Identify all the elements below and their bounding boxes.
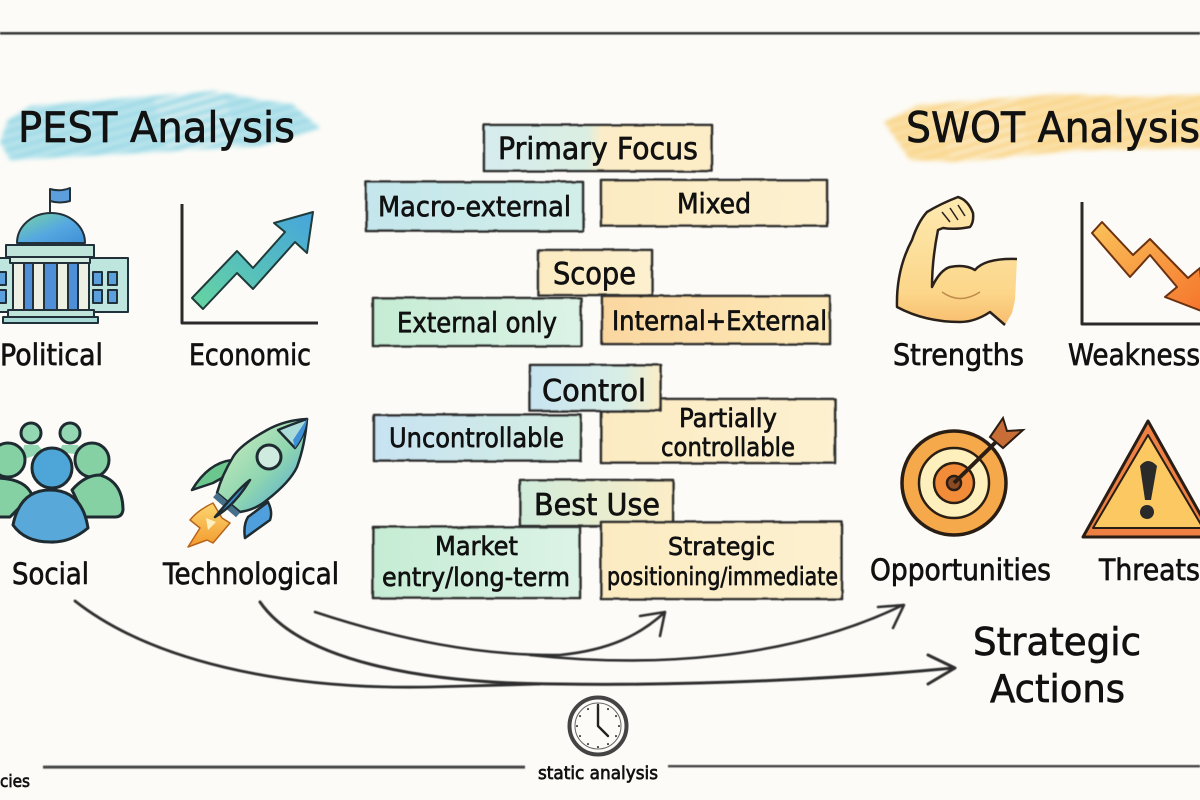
heading box: Primary Focus: Primary Focus bbox=[498, 132, 698, 167]
bottom rule right bbox=[668, 765, 1200, 767]
heading: PEST Analysis bbox=[0, 91, 320, 160]
icon: clock bbox=[570, 698, 626, 754]
icon: falling chart bbox=[1082, 202, 1200, 324]
cell: Internal+External: Internal+External bbox=[612, 306, 827, 337]
cell: Partially controllable: Partially bbox=[679, 404, 777, 434]
icon: warning triangle bbox=[1083, 421, 1200, 537]
icon: group of people bbox=[0, 423, 123, 542]
cell: Market entry/long-term: entry/long-term bbox=[382, 563, 570, 593]
arrow: Technological to Strategic Actions bbox=[260, 602, 955, 684]
heading box: Best Use bbox=[520, 480, 673, 526]
text: Strategic Actions: Strategic bbox=[973, 620, 1141, 664]
label: Political: Political bbox=[0, 338, 103, 372]
heading box: Control: Control bbox=[542, 374, 646, 409]
panel: comparison table bbox=[366, 125, 842, 599]
cell: Macro-external: Macro-external bbox=[378, 190, 571, 223]
bottom rule left bbox=[43, 766, 525, 769]
label: Strengths: Strengths bbox=[893, 338, 1024, 372]
arrows: flows to strategic actions bbox=[75, 601, 955, 687]
row: Best Use bbox=[373, 480, 842, 599]
cell: Uncontrollable: Uncontrollable bbox=[389, 423, 564, 454]
label: Opportunities: Opportunities bbox=[870, 553, 1051, 587]
panel: PEST analysis bbox=[0, 91, 339, 591]
label: Technological: Technological bbox=[162, 557, 339, 591]
caption: static analysis: static analysis bbox=[538, 763, 658, 784]
cell: Strategic positioning/immediate: Strategic bbox=[668, 532, 775, 561]
heading box: Scope: Scope bbox=[553, 257, 636, 292]
footnote fragment: cies bbox=[0, 772, 30, 792]
cell: Uncontrollable bbox=[374, 415, 581, 461]
row: Control bbox=[374, 365, 835, 463]
arrow: Technological to Mixed bbox=[315, 612, 665, 655]
cell: External only bbox=[373, 298, 581, 346]
icon: flexed arm bbox=[897, 197, 1017, 325]
top rule bbox=[0, 32, 1200, 35]
row: Primary Focus bbox=[366, 125, 827, 231]
cell: Macro-external bbox=[366, 182, 583, 231]
heading box: Control bbox=[530, 365, 661, 411]
cell: Mixed bbox=[601, 180, 827, 226]
heading box: Scope bbox=[538, 250, 652, 295]
cell: Partially controllable: controllable bbox=[661, 433, 795, 463]
cell: Strategic positioning/immediate: positioning/immediate bbox=[607, 562, 838, 591]
panel: SWOT analysis bbox=[870, 94, 1200, 587]
cell: Mixed: Mixed bbox=[677, 187, 751, 220]
label: Economic: Economic bbox=[189, 338, 311, 372]
heading: SWOT Analysis bbox=[884, 94, 1200, 162]
row: Scope bbox=[373, 250, 830, 346]
cell: Market entry/long-term bbox=[373, 527, 580, 598]
icon: target with arrow bbox=[902, 418, 1023, 535]
arrow: to Opportunities bbox=[530, 605, 904, 660]
cell: External only: External only bbox=[397, 306, 557, 339]
cell: Market entry/long-term: Market bbox=[435, 532, 518, 562]
label: Social: Social bbox=[12, 557, 89, 591]
text: Strategic Actions bbox=[973, 620, 1141, 711]
heading box: Best Use: Best Use bbox=[534, 488, 660, 523]
cell: Internal+External bbox=[602, 296, 830, 344]
cell: Strategic positioning/immediate bbox=[601, 522, 842, 599]
arrow: Social to Strategic Actions bbox=[75, 601, 540, 687]
icon: government building bbox=[0, 188, 128, 323]
heading: PEST Analysis: PEST Analysis bbox=[18, 103, 295, 152]
text: Strategic Actions: Actions bbox=[990, 667, 1125, 711]
cell: Partially controllable bbox=[601, 399, 835, 463]
icon: rising chart bbox=[182, 204, 318, 323]
icon: rocket bbox=[188, 419, 307, 547]
